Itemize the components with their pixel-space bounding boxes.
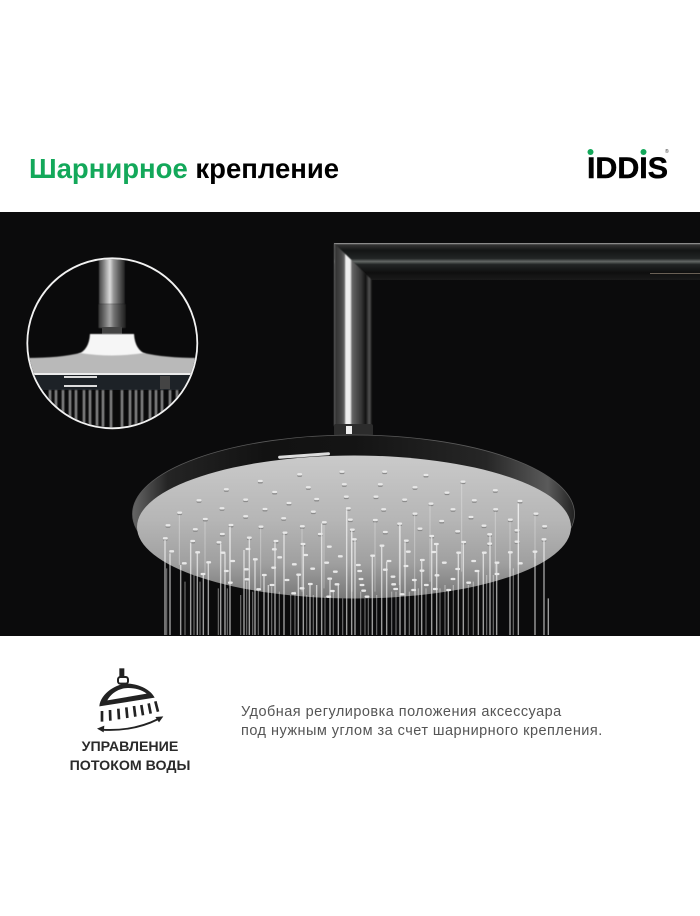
face xyxy=(137,456,571,598)
stem xyxy=(119,668,124,678)
logo: IDDIS: IDDIS xyxy=(587,152,668,185)
background xyxy=(0,212,700,636)
nozzles xyxy=(164,472,546,597)
dome xyxy=(99,684,155,706)
nozzles and water xyxy=(164,472,548,635)
icon caption: ПОТОКОМ ВОДЫ xyxy=(70,758,190,774)
ring xyxy=(118,677,128,684)
rim highlight xyxy=(278,452,330,459)
secondary streams xyxy=(167,568,513,635)
water streams xyxy=(165,503,548,635)
panel: shower photo xyxy=(0,212,700,636)
icon: water flow control xyxy=(97,668,164,732)
inset circle: hinge close-up xyxy=(25,255,200,430)
icon caption xyxy=(70,738,190,774)
shower head xyxy=(132,435,574,635)
nozzle shadows xyxy=(164,473,546,545)
swing arrow xyxy=(102,719,158,730)
inset disc xyxy=(25,353,200,374)
logo: IDDIS: ® xyxy=(665,148,669,155)
inset chrome band xyxy=(34,375,190,390)
inset water xyxy=(50,390,177,430)
mist xyxy=(340,592,362,635)
description: под нужным углом за счет шарнирного крепления. xyxy=(241,723,603,739)
horizontal pipe xyxy=(334,243,700,280)
icon caption: УПРАВЛЕНИЕ xyxy=(82,738,178,754)
water on the face xyxy=(179,483,535,592)
vertical pipe xyxy=(334,243,373,436)
description: Удобная регулировка положения аксессуара xyxy=(241,704,562,720)
nozzle bars xyxy=(102,701,158,722)
rim xyxy=(132,435,574,593)
description xyxy=(241,704,603,739)
title: Шарнирное крепление xyxy=(29,153,339,184)
inset mount xyxy=(78,333,146,356)
inset pipe xyxy=(99,255,125,304)
inset collar xyxy=(98,304,126,328)
